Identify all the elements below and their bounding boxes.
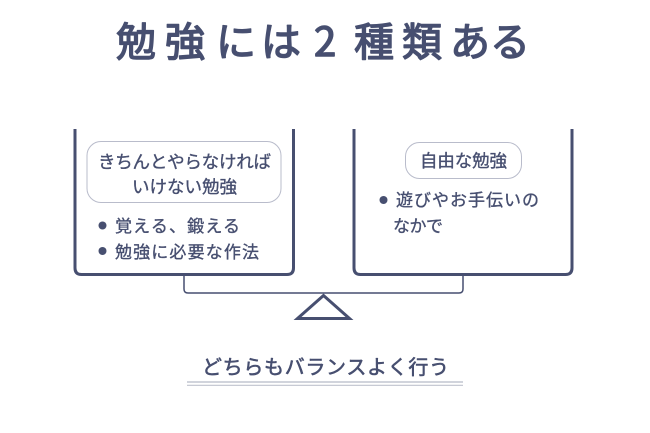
label box: free study: 自由な勉強 (420, 148, 508, 173)
title: 勉強には2種類ある (116, 10, 530, 68)
balance beam (184, 276, 463, 293)
bullet list: right (380, 186, 539, 237)
caption underline brush stroke (187, 382, 463, 385)
label box: must-do study: きちんとやらなければ (98, 149, 271, 174)
bullet list: right: なかで (393, 212, 443, 237)
bullet list: right: 遊びやお手伝いの (396, 186, 539, 211)
panel: right, free study (354, 129, 572, 274)
bullet list: left (98, 212, 259, 263)
balance fulcrum triangle (298, 296, 350, 318)
bullet list: left: 勉強に必要な作法 (115, 238, 259, 263)
caption: どちらもバランスよく行う (202, 351, 449, 380)
label box: must-do study (87, 142, 281, 202)
label box: must-do study: いけない勉強 (132, 174, 238, 199)
bullet list: left: 覚える、鍛える (115, 212, 240, 237)
label box: free study (406, 142, 522, 178)
panel: left, study that must be done (75, 129, 294, 274)
